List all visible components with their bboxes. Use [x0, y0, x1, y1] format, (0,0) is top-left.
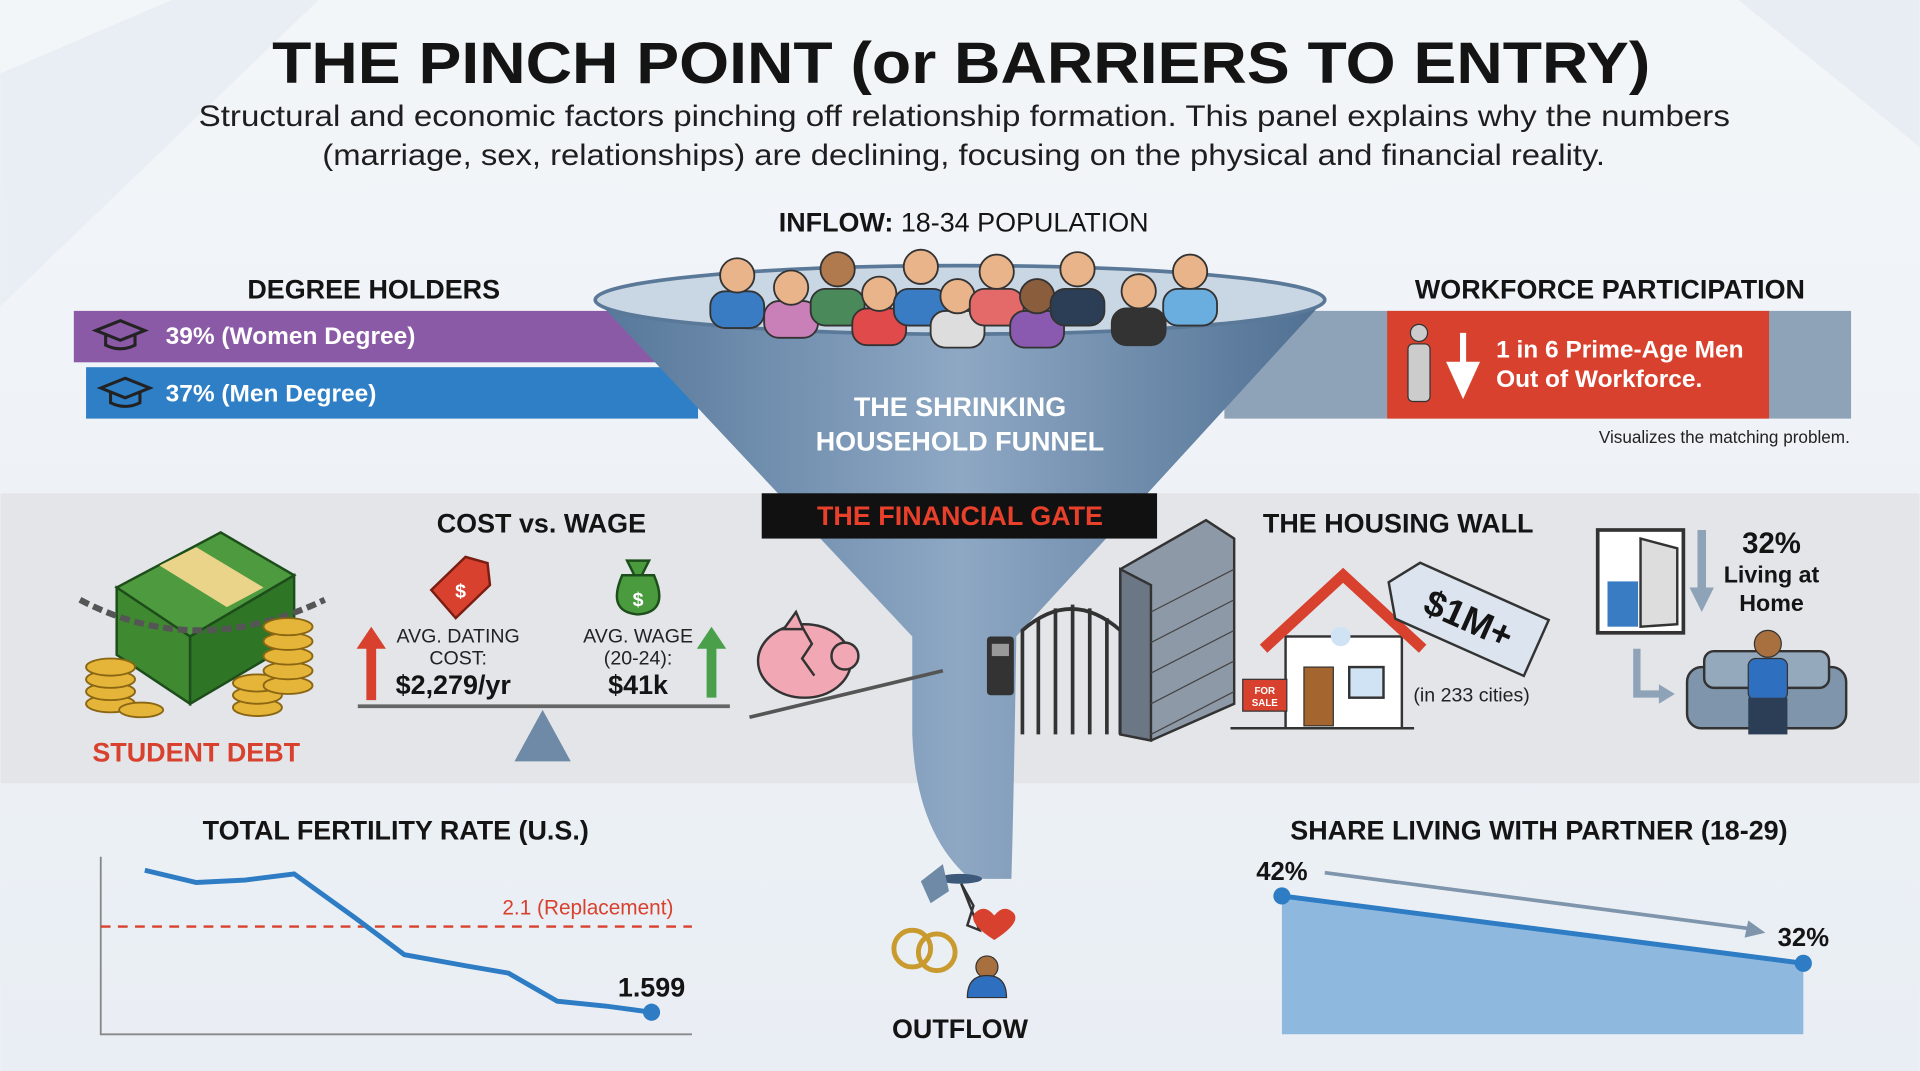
outflow	[892, 864, 1029, 1044]
panel: living at home	[1598, 527, 1846, 734]
panel: cost vs wage	[357, 508, 730, 761]
icon: house: SALE	[1252, 698, 1278, 709]
subtitle: (marriage, sex, relationships) are declining, focusing on the physical and financial reality.	[322, 139, 1605, 172]
chart: total fertility rate: 1.599	[618, 972, 685, 1002]
subtitle	[199, 100, 1730, 172]
chart: total fertility rate: TOTAL FERTILITY RATE (U.S.)	[203, 816, 589, 846]
panel: housing wall: THE HOUSING WALL	[1263, 508, 1533, 538]
panel: cost vs wage: COST vs. WAGE	[437, 508, 646, 538]
icon: gate and brick wall	[1022, 520, 1234, 741]
icon: money bag: $	[633, 589, 644, 611]
chart: share living with partner: SHARE LIVING WITH PARTNER (18-29)	[1290, 816, 1788, 846]
panel: workforce participation: Visualizes the matching problem.	[1599, 427, 1850, 447]
panel: workforce participation: WORKFORCE PARTICIPATION	[1415, 275, 1805, 305]
chart: share living with partner	[1256, 816, 1829, 1034]
inflow label: INFLOW: 18-34 POPULATION	[779, 207, 1149, 237]
subtitle: Structural and economic factors pinching off relationship formation. This panel explains why the numbers	[199, 100, 1730, 133]
icon: money bag	[617, 561, 659, 614]
panel: degree holders: 39% (Women Degree)	[166, 323, 415, 350]
icon: student debt money: STUDENT DEBT	[92, 737, 301, 767]
price tag $1M+	[1376, 554, 1549, 676]
panel: degree holders: 37% (Men Degree)	[166, 380, 376, 407]
panel: housing wall: (in 233 cities)	[1413, 684, 1530, 706]
panel: cost vs wage: $2,279/yr	[396, 670, 511, 700]
icon: price tag	[431, 557, 490, 618]
icon: house: FOR	[1254, 686, 1275, 697]
financial gate band: THE FINANCIAL GATE	[817, 501, 1103, 531]
icon: keypad	[987, 636, 1014, 695]
chart: total fertility rate: 2.1 (Replacement)	[502, 896, 673, 919]
panel: cost vs wage: $41k	[608, 670, 668, 700]
funnel	[595, 250, 1325, 884]
icon: broken piggy bank	[749, 612, 943, 717]
panel: degree holders: DEGREE HOLDERS	[247, 275, 500, 305]
financial gate band	[762, 493, 1157, 539]
icon: price tag: $	[455, 580, 466, 602]
panel: degree holders	[74, 275, 698, 419]
panel: living at home: Home	[1739, 590, 1804, 616]
panel: living at home: Living at	[1724, 562, 1820, 588]
price tag $1M+: $1M+	[1418, 581, 1520, 657]
funnel: THE SHRINKING	[854, 392, 1066, 422]
panel: workforce participation: 1 in 6 Prime-Age Men	[1496, 336, 1744, 363]
panel: living at home: 32%	[1742, 527, 1801, 560]
icon: house	[1231, 575, 1423, 728]
panel: cost vs wage: AVG. DATING	[397, 626, 520, 648]
inflow people	[710, 250, 1217, 348]
title: THE PINCH POINT (or BARRIERS TO ENTRY)	[272, 31, 1650, 96]
outflow: OUTFLOW	[892, 1014, 1029, 1044]
panel: cost vs wage: (20-24):	[604, 648, 672, 670]
panel: workforce participation	[1224, 275, 1851, 447]
chart: share living with partner: 42%	[1256, 858, 1308, 886]
chart: total fertility rate	[101, 816, 692, 1034]
panel: cost vs wage: COST:	[429, 648, 487, 670]
panel: workforce participation: Out of Workforce.	[1496, 366, 1702, 393]
icon: student debt money	[80, 532, 325, 767]
panel: housing wall	[1231, 508, 1549, 728]
chart: share living with partner: 32%	[1778, 924, 1829, 952]
panel: cost vs wage: AVG. WAGE	[583, 626, 693, 648]
funnel: HOUSEHOLD FUNNEL	[816, 426, 1104, 456]
